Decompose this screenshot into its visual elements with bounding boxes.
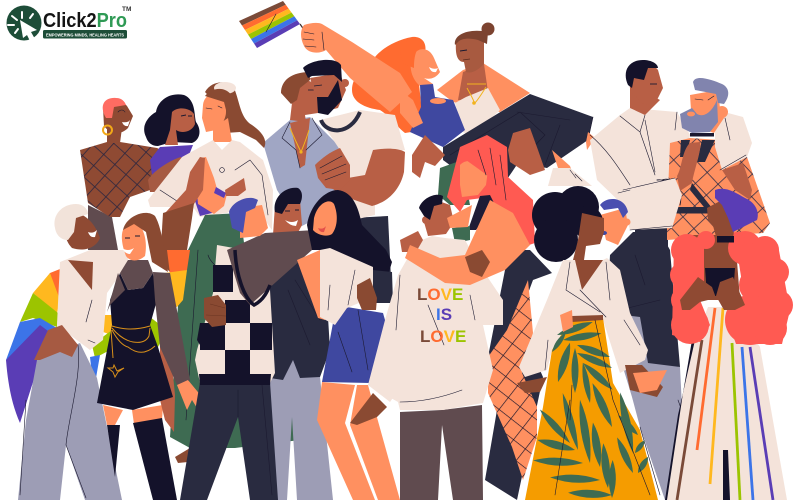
shirt cuff xyxy=(623,178,682,230)
hand on arm xyxy=(465,250,490,277)
head xyxy=(229,198,268,238)
sweater xyxy=(148,140,273,230)
head xyxy=(419,195,454,236)
IS line: IS xyxy=(436,305,452,324)
open collar skin xyxy=(290,118,310,168)
chest xyxy=(458,64,488,100)
skirt xyxy=(322,307,387,383)
ponytail xyxy=(205,82,265,148)
person: woman being carried xyxy=(400,38,595,192)
hand and forearm xyxy=(34,325,78,360)
logo icon xyxy=(6,6,42,41)
cape purple band xyxy=(6,325,80,423)
brown hand on shoulder xyxy=(400,231,423,252)
cape orange band xyxy=(36,265,70,320)
coral fluffy jacket right xyxy=(725,231,793,345)
green coat xyxy=(170,213,300,463)
person: bearded man in white t-shirt xyxy=(303,60,405,300)
trouser stripes xyxy=(677,308,773,500)
face xyxy=(313,201,337,236)
hand on waist xyxy=(357,278,377,310)
head xyxy=(680,78,728,133)
skirt xyxy=(525,318,658,500)
dark trousers behind xyxy=(665,340,700,500)
sweater xyxy=(368,240,503,410)
dark hand xyxy=(517,377,547,393)
sweater hem xyxy=(199,374,271,385)
dangling hand xyxy=(350,393,387,425)
head xyxy=(600,199,630,245)
arm and hand xyxy=(301,23,412,112)
person: man in grey shirt xyxy=(263,72,353,227)
person: purple-haired person in coral fluffy jacket xyxy=(665,189,793,500)
head xyxy=(411,49,440,86)
cape right orange xyxy=(167,250,190,274)
cape inner blue xyxy=(90,355,100,378)
person: man in LOVE IS LOVE sweater xyxy=(350,195,530,500)
cape inner yellow xyxy=(103,315,112,335)
ankle xyxy=(586,132,595,150)
hair xyxy=(307,190,392,285)
person: woman in fishnet top xyxy=(80,98,183,250)
dress xyxy=(97,273,173,410)
head xyxy=(273,188,302,238)
collar ring xyxy=(321,112,360,130)
sweater lettering xyxy=(417,285,466,346)
face xyxy=(165,108,195,145)
LOVE line 2: LOVE xyxy=(420,327,466,346)
person: woman in black dress xyxy=(97,213,202,500)
peach arm and hand xyxy=(196,157,228,214)
logo wordmark: Click2Pro xyxy=(43,10,127,32)
pride flag xyxy=(239,1,309,48)
face xyxy=(707,200,738,230)
left carrying arm xyxy=(412,135,445,178)
person: woman with coral hair xyxy=(438,135,552,500)
trademark: TM xyxy=(122,6,131,13)
grey trousers xyxy=(607,313,717,500)
green background coat xyxy=(438,160,470,205)
fishnet leg xyxy=(488,280,537,480)
fishnet top xyxy=(80,142,183,217)
centre gap xyxy=(723,450,730,500)
hood xyxy=(422,236,465,248)
trousers xyxy=(180,382,278,500)
person: woman in cream sweater with ponytail xyxy=(148,82,273,230)
shoulders xyxy=(437,63,530,112)
trousers xyxy=(88,205,118,250)
black top xyxy=(705,268,735,296)
neck and head xyxy=(103,98,133,143)
sweater checks xyxy=(197,265,272,377)
left sleeve xyxy=(107,273,125,312)
sneaker xyxy=(548,168,592,186)
face xyxy=(460,161,488,197)
head and neck xyxy=(54,204,100,290)
person: man in checkered sweater xyxy=(180,198,315,500)
cream top xyxy=(57,250,128,350)
cape yellow band xyxy=(33,273,60,313)
top xyxy=(320,248,373,325)
leather jacket xyxy=(607,232,680,367)
taupe neck and sleeves xyxy=(120,260,153,290)
orange hair xyxy=(352,37,426,133)
peach arm xyxy=(405,200,530,285)
person: white-haired person xyxy=(18,204,128,500)
front thigh xyxy=(132,405,163,424)
legs xyxy=(317,382,375,500)
peach hand at waist xyxy=(560,310,573,332)
head and neck xyxy=(202,89,232,142)
choker xyxy=(717,236,734,242)
green shoulder patch xyxy=(452,226,470,243)
purple patch xyxy=(194,198,216,216)
shirt xyxy=(590,108,690,230)
striped trousers xyxy=(667,307,787,500)
heart hands xyxy=(680,277,745,310)
logo tagline: EMPOWERING MINDS, HEALING HEARTS xyxy=(46,32,124,37)
person: grey-bearded man in fishnet xyxy=(618,78,770,240)
raised upper arm xyxy=(400,90,423,128)
linked hands xyxy=(625,365,667,397)
grey trousers xyxy=(18,343,122,500)
cape blue band xyxy=(6,318,80,385)
person: man with hair bun xyxy=(437,22,530,137)
hand xyxy=(148,157,184,192)
arm xyxy=(297,250,325,320)
choker xyxy=(690,133,714,136)
neck and head xyxy=(626,60,663,115)
person: woman with dark bob xyxy=(144,94,199,192)
chest xyxy=(690,235,740,300)
t-shirt xyxy=(320,110,405,222)
face and neck xyxy=(573,213,604,290)
head xyxy=(122,213,168,272)
blue top xyxy=(410,84,465,147)
left sleeve cuff xyxy=(368,372,397,402)
scrunchie xyxy=(214,82,236,94)
tank top xyxy=(455,88,500,137)
clasped hands xyxy=(315,148,350,190)
right carrying arm xyxy=(508,128,545,175)
person: man in white shirt xyxy=(590,60,690,250)
high-five hands xyxy=(160,157,246,280)
head xyxy=(303,60,349,115)
jacket xyxy=(270,260,330,380)
trousers xyxy=(635,225,668,250)
bracelets xyxy=(657,179,681,210)
sweater base xyxy=(195,245,275,383)
trousers xyxy=(350,216,392,300)
hair xyxy=(144,94,199,146)
back leg and boot xyxy=(103,405,123,425)
legs in dark trousers xyxy=(443,94,593,192)
cape inner green xyxy=(92,330,112,358)
purple hair xyxy=(715,189,758,232)
person: woman in yellow leaf skirt xyxy=(517,186,667,500)
coral fluffy jacket left xyxy=(670,231,715,344)
front boot xyxy=(133,418,177,500)
hair xyxy=(447,135,535,247)
peach shoulder xyxy=(447,205,472,228)
trousers xyxy=(400,405,483,500)
person: woman with long dark hair xyxy=(297,190,400,500)
brown hand on wrist xyxy=(225,178,246,196)
head xyxy=(281,72,320,122)
taupe sleeve xyxy=(227,230,315,305)
hair xyxy=(532,186,603,262)
gold earring xyxy=(103,126,112,134)
shoe xyxy=(175,448,190,463)
cape green band xyxy=(20,293,58,327)
blouse xyxy=(519,258,648,377)
hand xyxy=(177,380,202,410)
hand on sweater xyxy=(204,295,226,327)
fishnet torso xyxy=(667,138,770,240)
gold chain xyxy=(290,128,309,152)
sleeve xyxy=(715,113,752,170)
person: raised arm with flag xyxy=(239,1,426,133)
brown arm xyxy=(162,157,205,257)
cape right green xyxy=(147,317,163,353)
purple top xyxy=(150,145,193,190)
harness xyxy=(680,140,715,212)
belt xyxy=(572,315,603,322)
navy coat and legs xyxy=(485,250,552,500)
black top xyxy=(468,195,495,230)
cape right yellow xyxy=(157,270,187,307)
neck xyxy=(710,215,735,240)
grey trousers xyxy=(267,360,333,500)
necklaces xyxy=(467,84,486,104)
skirt leaves xyxy=(533,319,651,499)
person: man in dark jacket xyxy=(267,188,333,500)
person: man in leather jacket xyxy=(600,199,717,500)
arm xyxy=(722,163,752,200)
shirt xyxy=(263,117,353,227)
hand on chest xyxy=(677,142,700,191)
right sleeve xyxy=(153,272,190,385)
gold chain belt xyxy=(108,326,155,377)
navy sleeve xyxy=(373,270,393,303)
head and hair xyxy=(455,22,494,73)
rainbow cape xyxy=(6,250,190,423)
arm xyxy=(325,149,405,206)
purple wristband xyxy=(214,187,226,198)
logo: Click2Pro xyxy=(6,6,131,41)
LOVE line 1: LOVE xyxy=(417,285,463,304)
brown leg behind xyxy=(160,335,175,432)
